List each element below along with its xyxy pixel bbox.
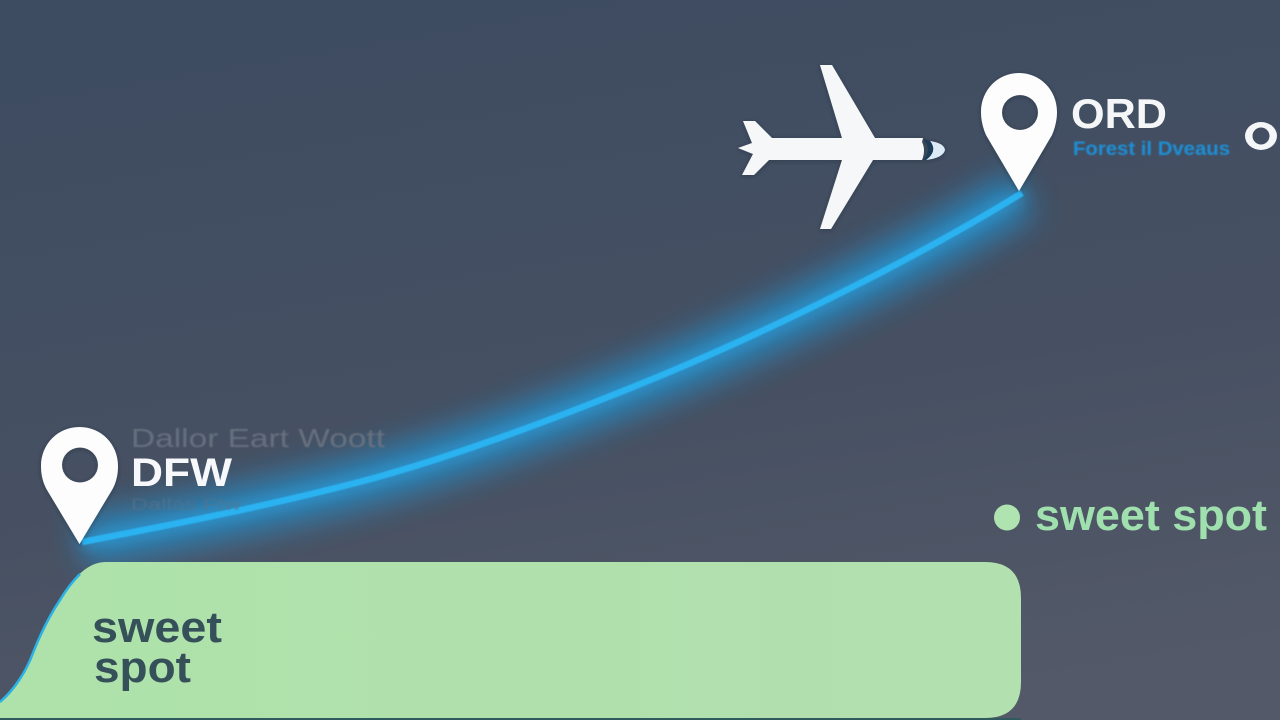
icon: small ring marker [1245, 122, 1277, 150]
legend text: sweet spot [1035, 491, 1267, 540]
icon: ORD location pin [981, 73, 1057, 191]
icon: airplane [738, 65, 945, 229]
sweet spot panel [0, 562, 1021, 718]
flight path arc with glow [82, 193, 1022, 542]
legend dot [994, 504, 1020, 530]
label: Dallor Fort Worth: Dallor Eart Woott [131, 423, 386, 453]
panel label: sweet spot [92, 603, 222, 692]
panel label: sweet spot: spot [94, 643, 191, 692]
panel label: sweet spot: sweet [92, 603, 222, 652]
legend: sweet spot [994, 491, 1267, 540]
icon: DFW location pin [41, 427, 118, 544]
label: ORD subtitle: Forest il Dveaus [1073, 139, 1230, 160]
label: faded DFW subtitle: Dallas Ftw [131, 495, 242, 514]
label: DFW: DFW [131, 451, 232, 495]
bottom edge strip [0, 718, 1021, 720]
label: ORD: ORD [1071, 90, 1167, 137]
